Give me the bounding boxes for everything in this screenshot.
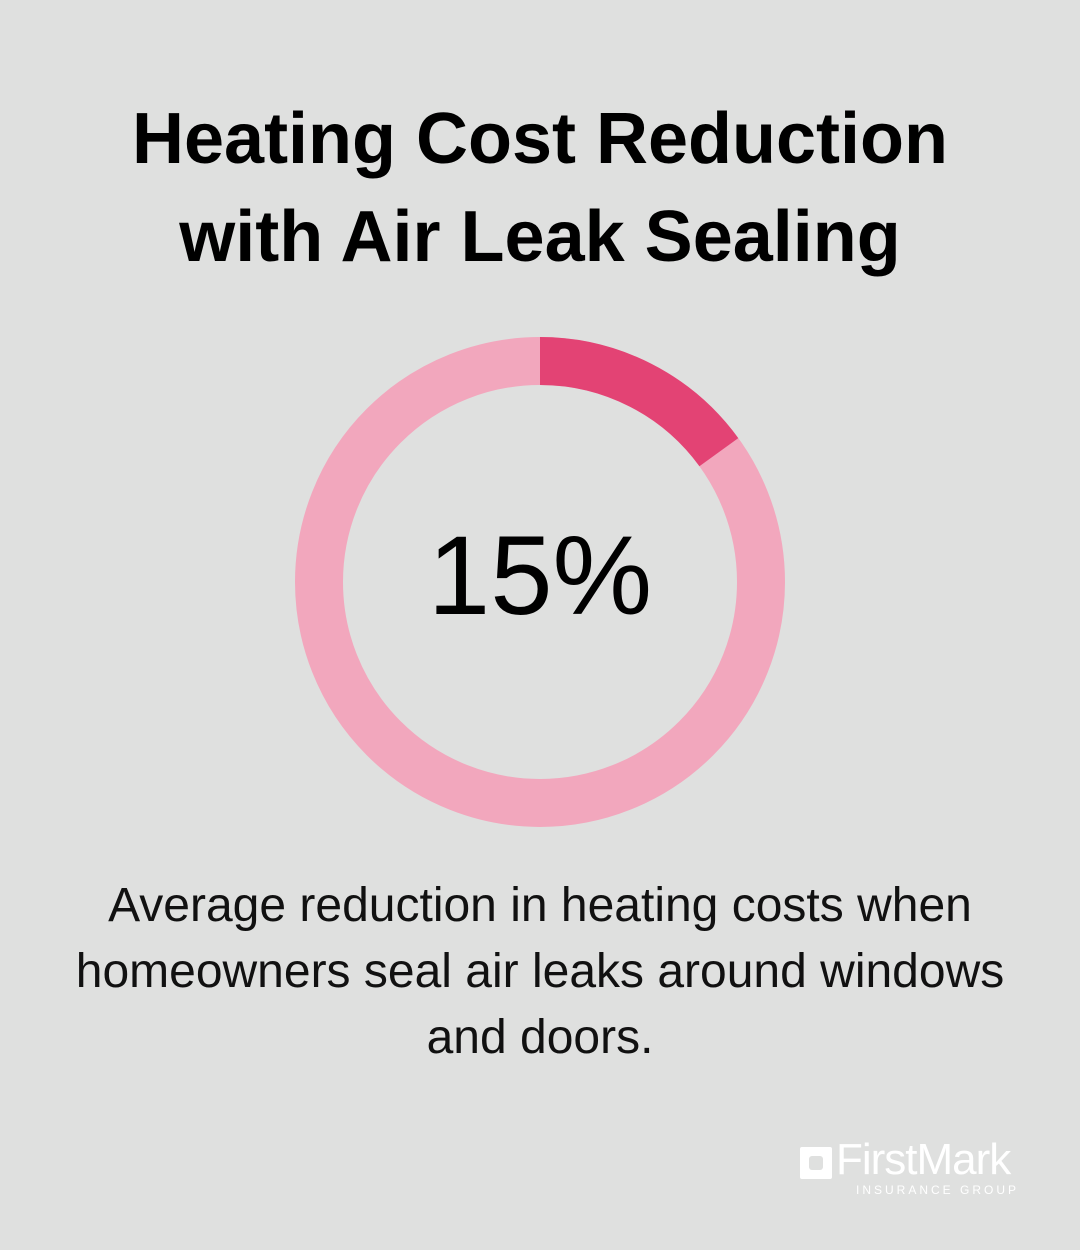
logo: FirstMark	[836, 1135, 1010, 1184]
title: Heating Cost Reduction	[132, 99, 948, 179]
donut chart: 15%	[428, 513, 652, 638]
description: homeowners seal air leaks around windows	[76, 945, 1004, 998]
description: Average reduction in heating costs when	[108, 879, 972, 932]
title	[132, 99, 948, 277]
description: and doors.	[427, 1011, 653, 1064]
logo: INSURANCE GROUP	[856, 1183, 1019, 1197]
logo	[800, 1135, 1019, 1197]
title: with Air Leak Sealing	[179, 197, 901, 277]
description	[76, 879, 1004, 1064]
